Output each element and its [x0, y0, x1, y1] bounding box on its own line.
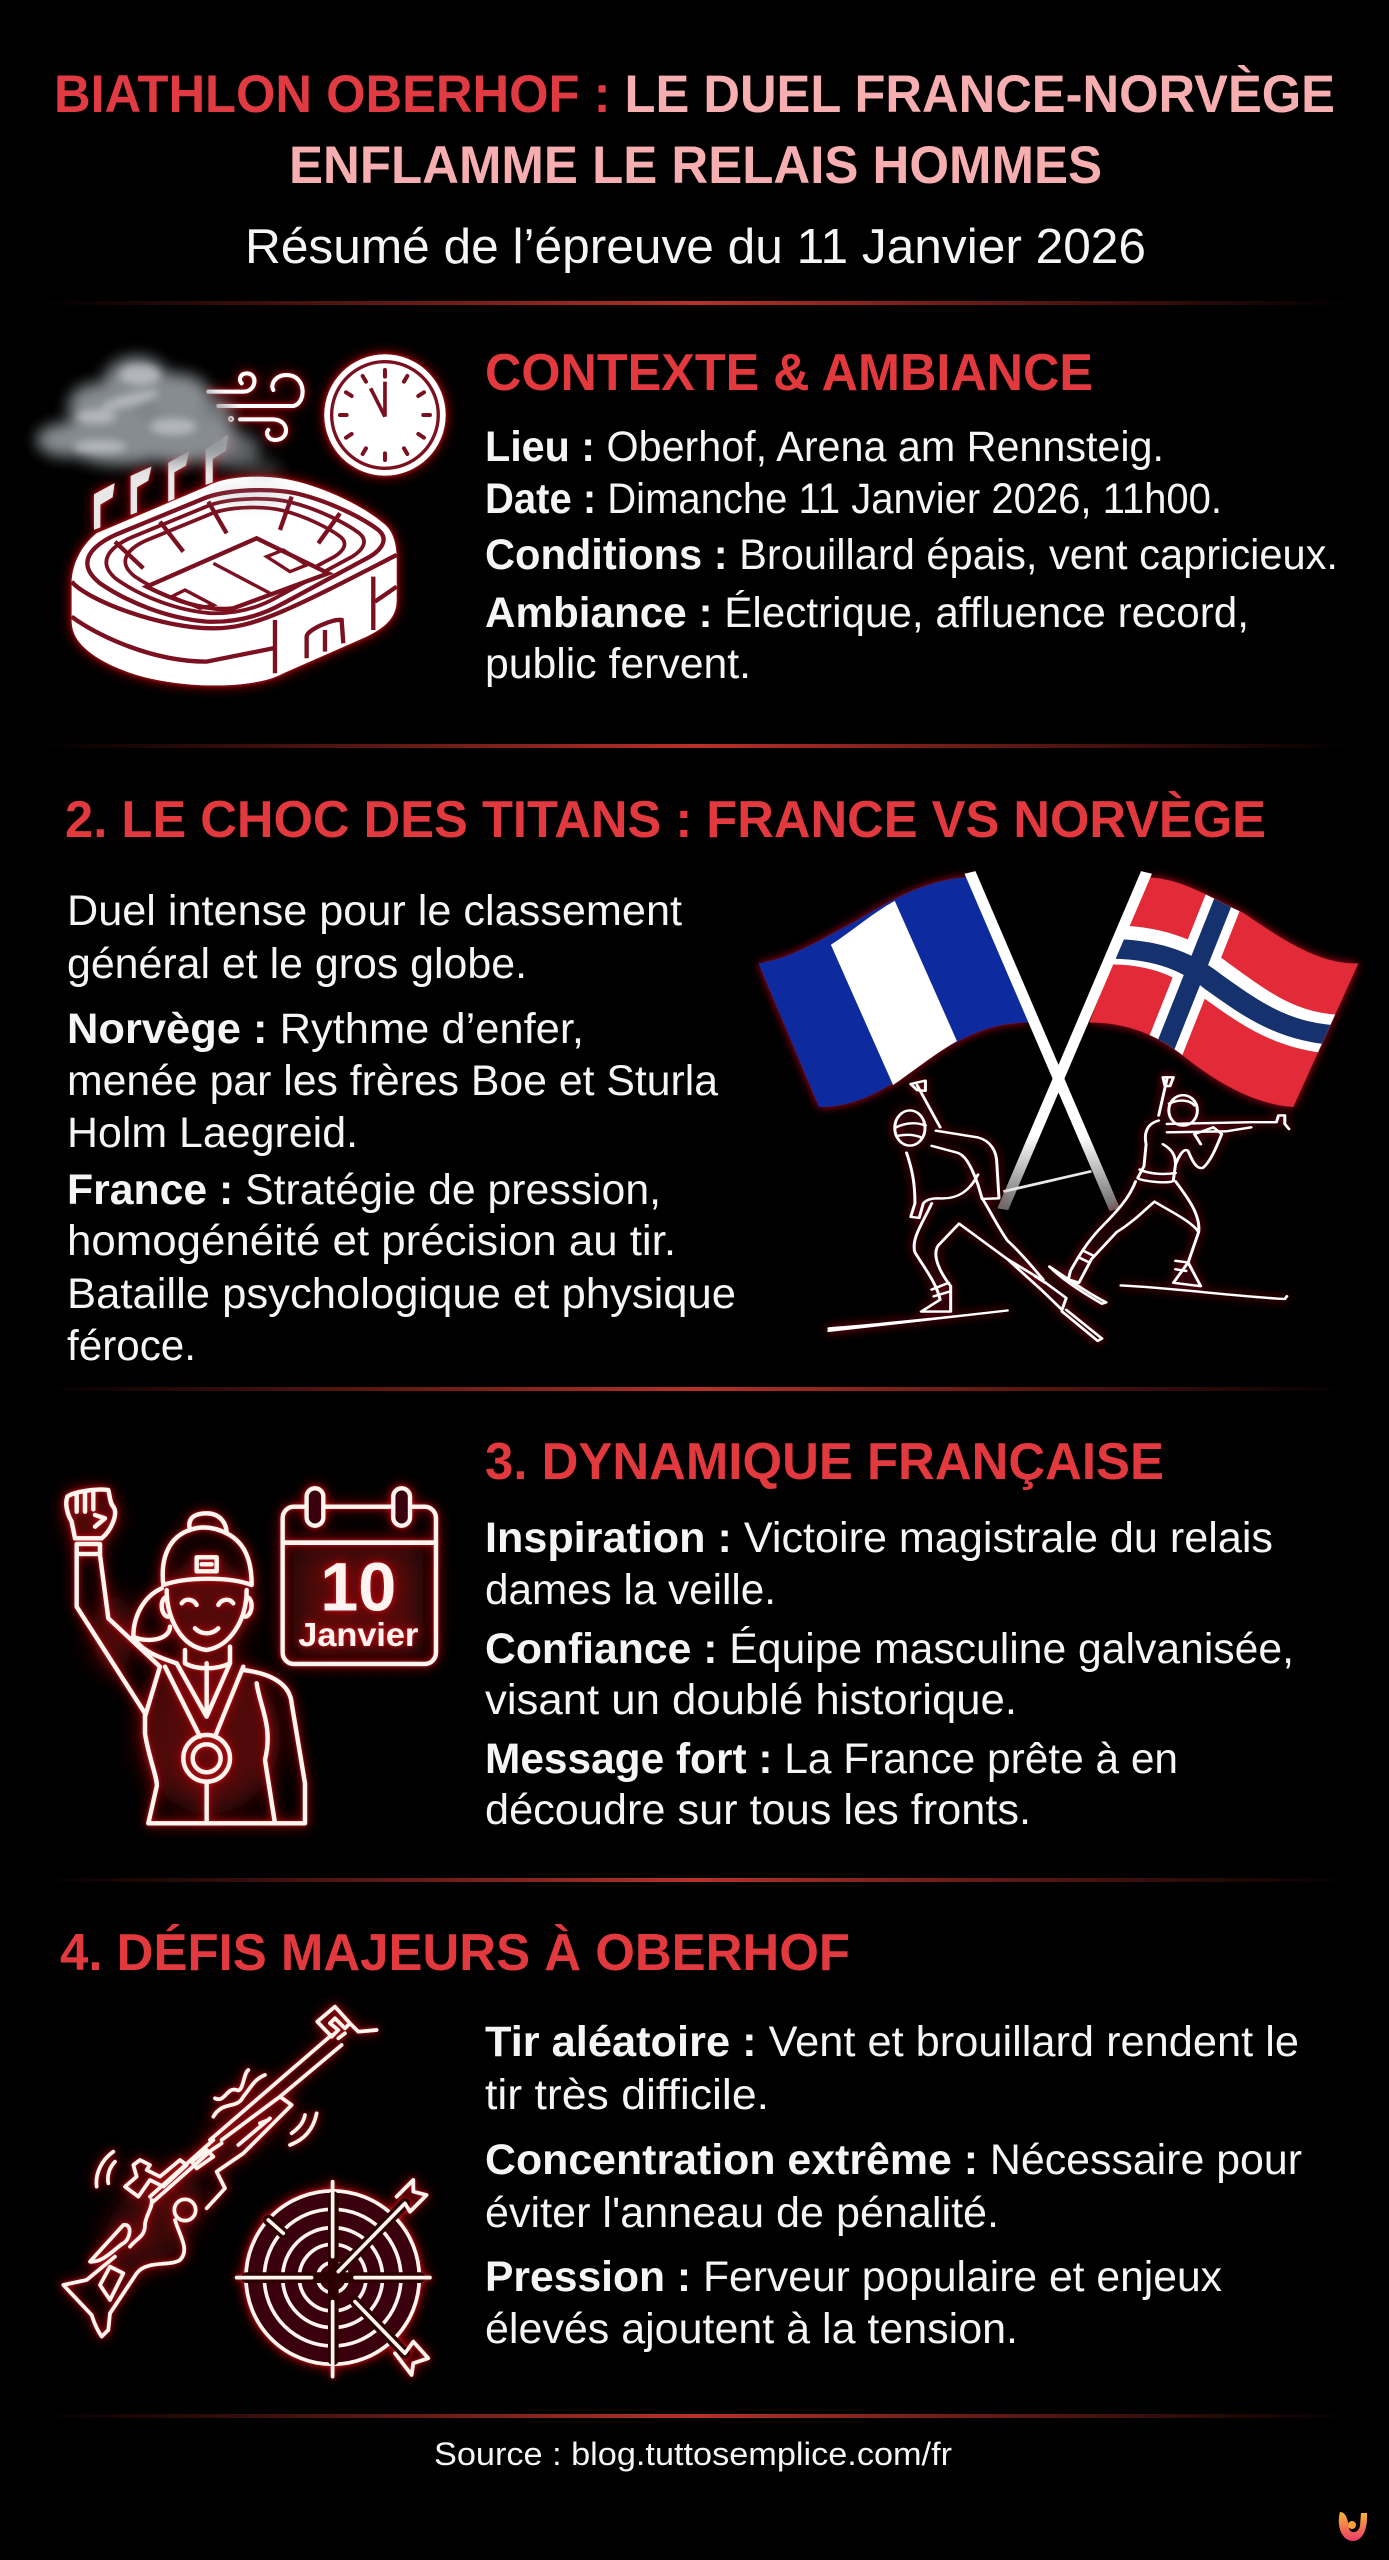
text block: contexte: Conditions : Brouillard épais, vent capricieux.: [485, 531, 1338, 579]
stadium bands and door: [72, 555, 397, 673]
panel: contexte et ambiance: [37, 344, 1338, 688]
calendar: Janvier: [298, 1617, 418, 1654]
biathlete shooting: [1049, 1077, 1289, 1304]
source: Source : blog.tuttosemplice.com/fr: [434, 2436, 952, 2472]
flag: Norway: [1089, 877, 1358, 1107]
text block: dynamique: Confiance : Équipe masculine galvanisée,: [485, 1625, 1294, 1673]
rifle: [63, 2007, 377, 2337]
text block: dynamique: découdre sur tous les fronts.: [485, 1786, 1031, 1834]
icon: rifle and target: [63, 2007, 430, 2377]
text block: contexte: [485, 423, 1338, 688]
title: [54, 64, 1335, 195]
text block: defis: Concentration extrême : Nécessaire pour: [485, 2136, 1302, 2184]
icon: crossed flags and biathletes: [759, 871, 1358, 1341]
text block: dynamique: visant un doublé historique.: [485, 1676, 1017, 1724]
text block: defis: tir très difficile.: [485, 2071, 769, 2119]
flag poles: [965, 871, 1152, 1211]
heading: dynamique: 3. DYNAMIQUE FRANÇAISE: [485, 1433, 1164, 1491]
stadium flags: [95, 437, 227, 528]
icon: athlete with medal and calendar: [66, 1488, 436, 1823]
text block: defis: élevés ajoutent à la tension.: [485, 2305, 1018, 2353]
text block: contexte: public fervent.: [485, 640, 751, 688]
stadium silhouette: [72, 477, 397, 685]
icon: stadium in fog with wind and clock: [37, 354, 446, 685]
panel: dynamique francaise: [66, 1433, 1294, 1834]
pitch: [147, 538, 328, 609]
text block: duel: [67, 887, 736, 1370]
subtitle: Résumé de l’épreuve du 11 Janvier 2026: [245, 220, 1146, 274]
calendar: [283, 1488, 436, 1664]
text block: defis: Pression : Ferveur populaire et enjeux: [485, 2253, 1222, 2301]
fog cloud: [37, 357, 293, 501]
panel: le choc des titans: [65, 791, 1358, 1370]
text block: dynamique: Message fort : La France prête à en: [485, 1735, 1178, 1783]
text block: duel: menée par les frères Boe et Sturla: [67, 1057, 718, 1105]
text block: dynamique: [485, 1514, 1294, 1834]
calendar: 10: [320, 1550, 396, 1626]
text block: dynamique: dames la veille.: [485, 1566, 776, 1614]
heading: contexte: CONTEXTE & AMBIANCE: [485, 344, 1093, 402]
text block: duel: général et le gros globe.: [67, 940, 527, 988]
heading: choc des titans: 2. LE CHOC DES TITANS : FRANCE VS NORVÈGE: [65, 791, 1266, 849]
rifle haze: [85, 2072, 303, 2292]
athlete outline: [66, 1490, 305, 1823]
text block: duel: Norvège : Rythme d’enfer,: [67, 1005, 584, 1053]
heading: defis: 4. DÉFIS MAJEURS À OBERHOF: [60, 1924, 850, 1982]
stadium rim and rows: [87, 490, 384, 622]
text block: defis: [485, 2018, 1302, 2353]
text block: contexte: Ambiance : Électrique, affluence record,: [485, 589, 1249, 637]
flag: France: [759, 877, 1028, 1107]
text block: duel: féroce.: [67, 1322, 196, 1370]
text block: dynamique: Inspiration : Victoire magistrale du relais: [485, 1514, 1273, 1562]
text block: defis: Tir aléatoire : Vent et brouillard rendent le: [485, 2018, 1299, 2066]
title: BIATHLON OBERHOF : LE DUEL FRANCE-NORVÈGE: [54, 64, 1335, 124]
text block: duel: Duel intense pour le classement: [67, 887, 682, 935]
icon: logo: [1339, 2512, 1367, 2541]
text block: duel: Holm Laegreid.: [67, 1109, 358, 1157]
clock face: [324, 354, 446, 476]
wind lines: [208, 373, 303, 440]
text block: contexte: Lieu : Oberhof, Arena am Rennsteig.: [485, 423, 1164, 471]
panel: defis majeurs: [60, 1924, 1302, 2377]
target: [237, 2180, 430, 2377]
text block: defis: éviter l'anneau de pénalité.: [485, 2189, 999, 2237]
biathlete skiing: [829, 1081, 1102, 1341]
text block: contexte: Date : Dimanche 11 Janvier 2026, 11h00.: [485, 475, 1222, 523]
text block: duel: homogénéité et précision au tir.: [67, 1217, 676, 1265]
title: ENFLAMME LE RELAIS HOMMES: [289, 136, 1102, 195]
text block: duel: Bataille psychologique et physique: [67, 1270, 736, 1318]
red haze: [67, 1497, 423, 1813]
text block: duel: France : Stratégie de pression,: [67, 1166, 661, 1214]
